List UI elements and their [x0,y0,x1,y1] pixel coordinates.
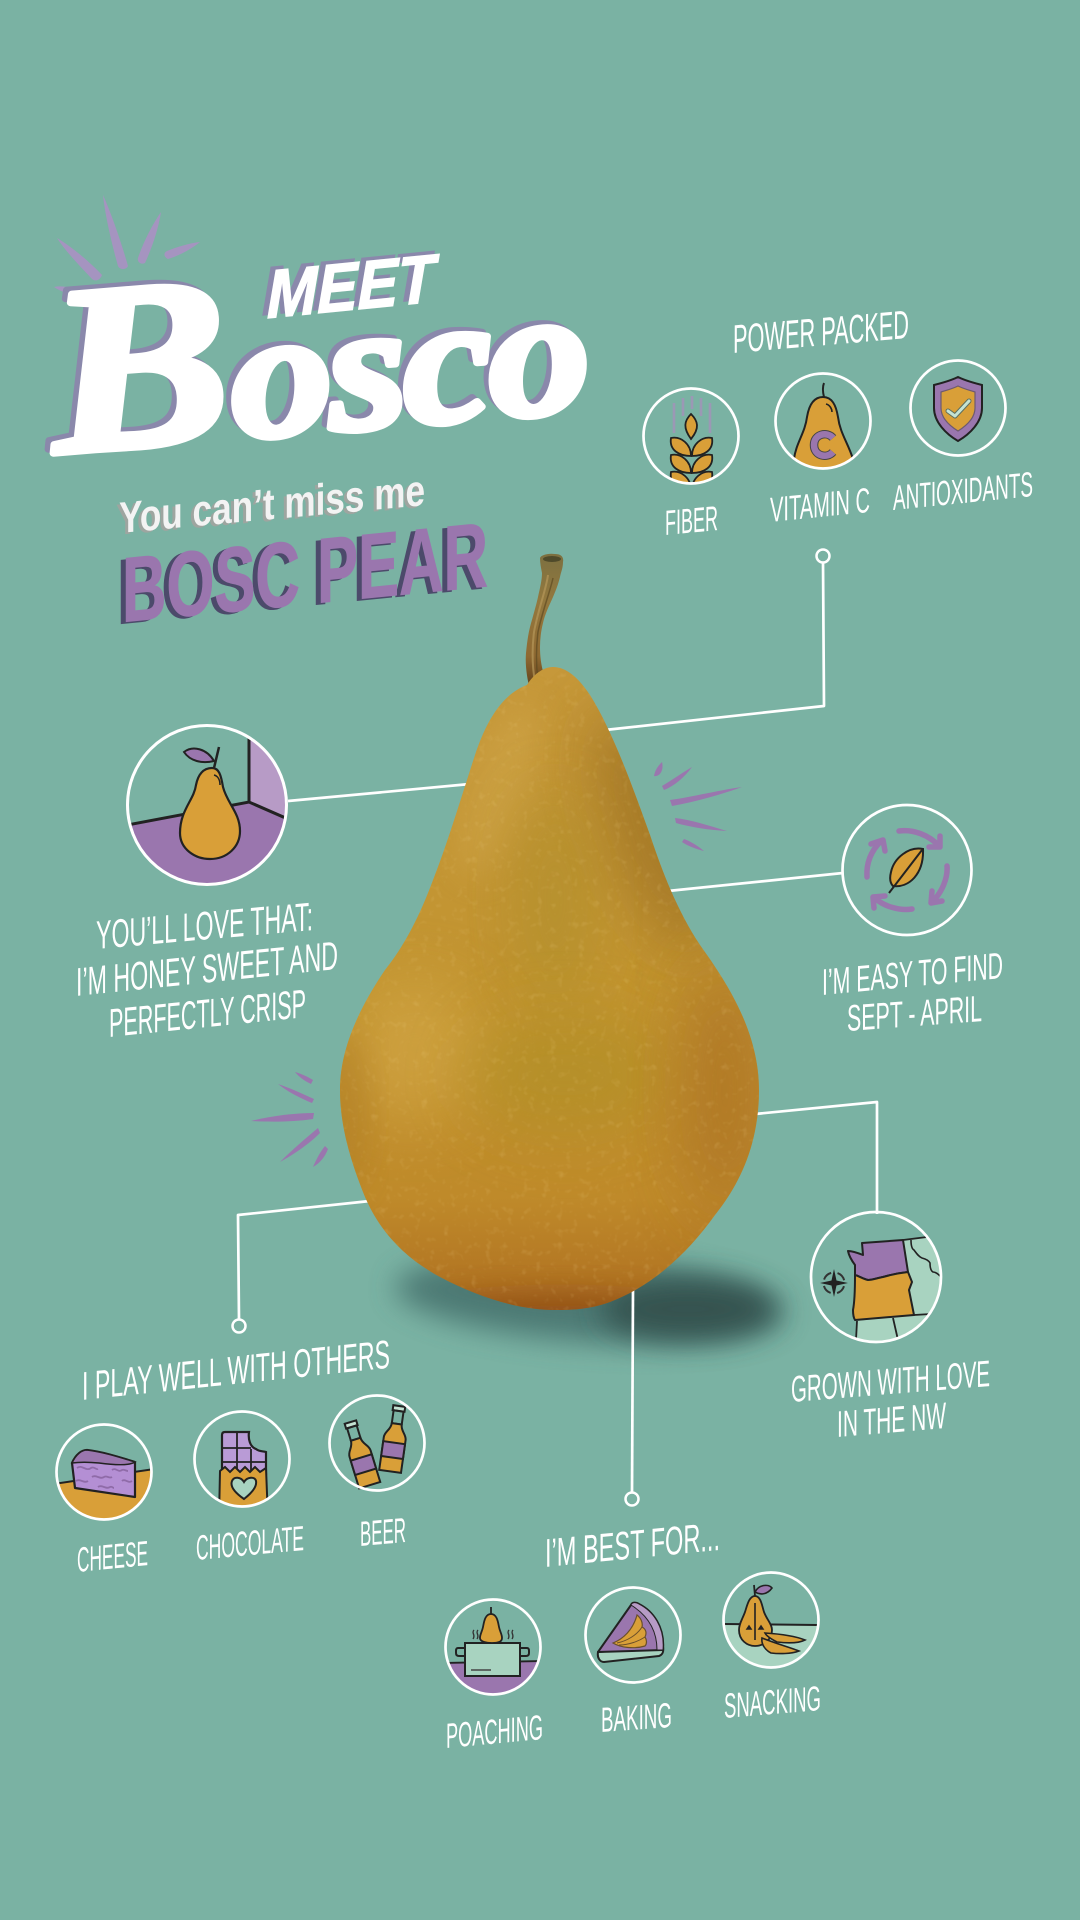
subtitle: BOSC PEAR: BOSC PEAR [117,505,483,644]
text: easy to find: SEPT - APRIL [847,987,982,1039]
icon: poaching pot [444,1598,542,1696]
heading: power packed: POWER PACKED [733,303,909,362]
subtitle: BOSC PEAR [117,503,488,644]
icon: cheese [55,1423,153,1521]
text: you'll love that: PERFECTLY CRISP [109,982,306,1046]
sparkle: title [54,195,200,297]
text: you'll love that: YOU’LL LOVE THAT: [96,895,313,958]
text: grown with love: IN THE NW [837,1394,946,1445]
icon: leaf with cycle arrows [842,805,972,935]
pear body [340,667,759,1310]
title word: MEET: MEET [262,237,435,330]
sparkle: left of pear [251,1072,328,1167]
pear stem [526,554,563,690]
text: you'll love that: I’M HONEY SWEET AND [76,934,338,1005]
icon: beer bottles [330,1396,424,1490]
connector lines [232,550,877,1506]
panel: easy to find [822,805,1003,1039]
label: baking: BAKING [601,1696,672,1740]
icon: snacking pear slices [722,1571,820,1669]
icon: vitamin C pear [776,374,870,481]
label: fiber: FIBER [665,499,718,543]
icon: pear in room [126,724,288,886]
title word: MEET: MEET [267,240,440,333]
sparkle: right of pear [654,762,742,851]
subtitle: BOSC PEAR: BOSC PEAR [122,503,488,642]
compass rose [820,1269,848,1297]
title word: Bosco: Bosco [31,194,588,502]
pear photo illustration [323,554,770,1355]
pear shadow [393,1244,787,1356]
title word: Bosco: Bosco [36,198,593,506]
panel: grown in the NW [791,1212,990,1445]
text: you'll love that [76,895,338,1046]
panel: pairings: BEER [360,1511,406,1554]
icon: chocolate [194,1412,290,1519]
panel: best for [443,1515,821,1756]
subtitle: You can't miss me: You can’t miss me [119,466,425,543]
title: Meet Bosco [31,194,593,506]
panel: pairings [54,1333,424,1580]
label: poaching: POACHING [446,1708,543,1756]
icon: fiber wheat [644,388,738,490]
icon: antioxidants shield [910,360,1006,456]
text: easy to find [822,944,1003,1039]
panel: power packed [644,303,1033,543]
subtitle: You can't miss me: You can’t miss me [116,468,422,545]
label: chocolate: CHOCOLATE [196,1519,304,1568]
panel: pairings: CHEESE [77,1534,148,1580]
heading: I play well with others: I PLAY WELL WITH OTHERS [82,1333,390,1409]
label: snacking: SNACKING [724,1679,821,1726]
label: vitamin C: VITAMIN C [770,481,870,530]
text: grown with love [791,1352,990,1445]
heading: I'm best for: I’M BEST FOR... [545,1515,720,1576]
icon: baking pie [586,1588,680,1682]
panel: honey sweet [76,715,338,1046]
icon: map of Washington and Oregon [810,1210,942,1344]
